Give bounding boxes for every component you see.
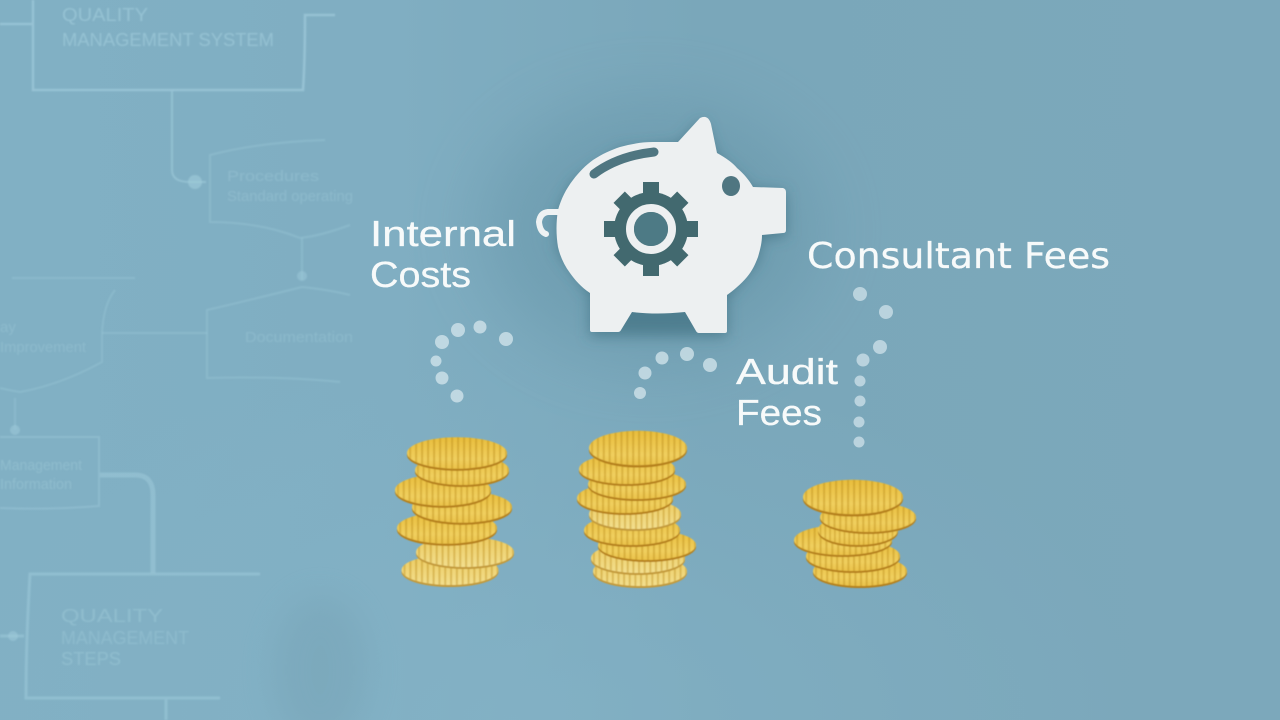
flowchart box: left process: ay	[0, 319, 16, 336]
background flowchart	[0, 0, 353, 720]
coin stack: consultant fees	[794, 480, 916, 588]
pig shadow	[558, 120, 786, 336]
flowchart box: left process: Improvement	[0, 339, 87, 356]
coin slot	[594, 152, 654, 174]
coin stream: audit fees	[634, 347, 717, 399]
pig body	[556, 117, 786, 333]
flowchart box: procedure: Standard operating	[227, 188, 353, 205]
flowchart box: left process	[0, 278, 135, 435]
flowchart box: quality management steps	[0, 574, 260, 720]
label: audit fees: Audit	[736, 351, 838, 392]
flowchart box: procedure: Procedures	[227, 168, 319, 185]
pig tail	[539, 212, 560, 234]
icon: piggy bank with gear	[539, 117, 786, 336]
flowchart box: documents: Documentation	[245, 329, 353, 346]
coin stream: internal costs	[430, 320, 513, 402]
pig eye	[722, 176, 740, 196]
flowchart box: quality management steps: QUALITY	[61, 606, 163, 626]
coin stream: consultant fees	[853, 287, 893, 448]
label: internal costs: Costs	[370, 254, 471, 295]
flowchart box: quality management system: QUALITY	[62, 5, 148, 25]
label: audit fees: Fees	[736, 392, 822, 433]
coin stack: internal costs	[395, 437, 514, 587]
flowchart box: quality management system	[0, 0, 335, 90]
flowchart box: quality management steps: MANAGEMENT	[61, 628, 189, 648]
flowchart box: procedure	[210, 140, 353, 281]
label: audit fees	[736, 351, 838, 433]
flowchart connector with node	[172, 91, 206, 189]
flowchart box: quality management system: MANAGEMENT SYSTEM	[62, 30, 274, 50]
coin stack: audit fees	[577, 431, 696, 588]
flowchart box: documents	[102, 287, 353, 382]
label: consultant fees: Consultant Fees	[807, 236, 1110, 277]
label: internal costs	[370, 213, 516, 295]
flowchart box: records: Management	[0, 457, 83, 474]
gear icon	[604, 182, 698, 276]
flowchart box: records: Information	[0, 476, 72, 493]
label: internal costs: Internal	[370, 213, 516, 254]
flowchart thick connector	[100, 475, 153, 573]
flowchart box: records	[0, 437, 99, 509]
flowchart box: quality management steps: STEPS	[61, 649, 121, 669]
